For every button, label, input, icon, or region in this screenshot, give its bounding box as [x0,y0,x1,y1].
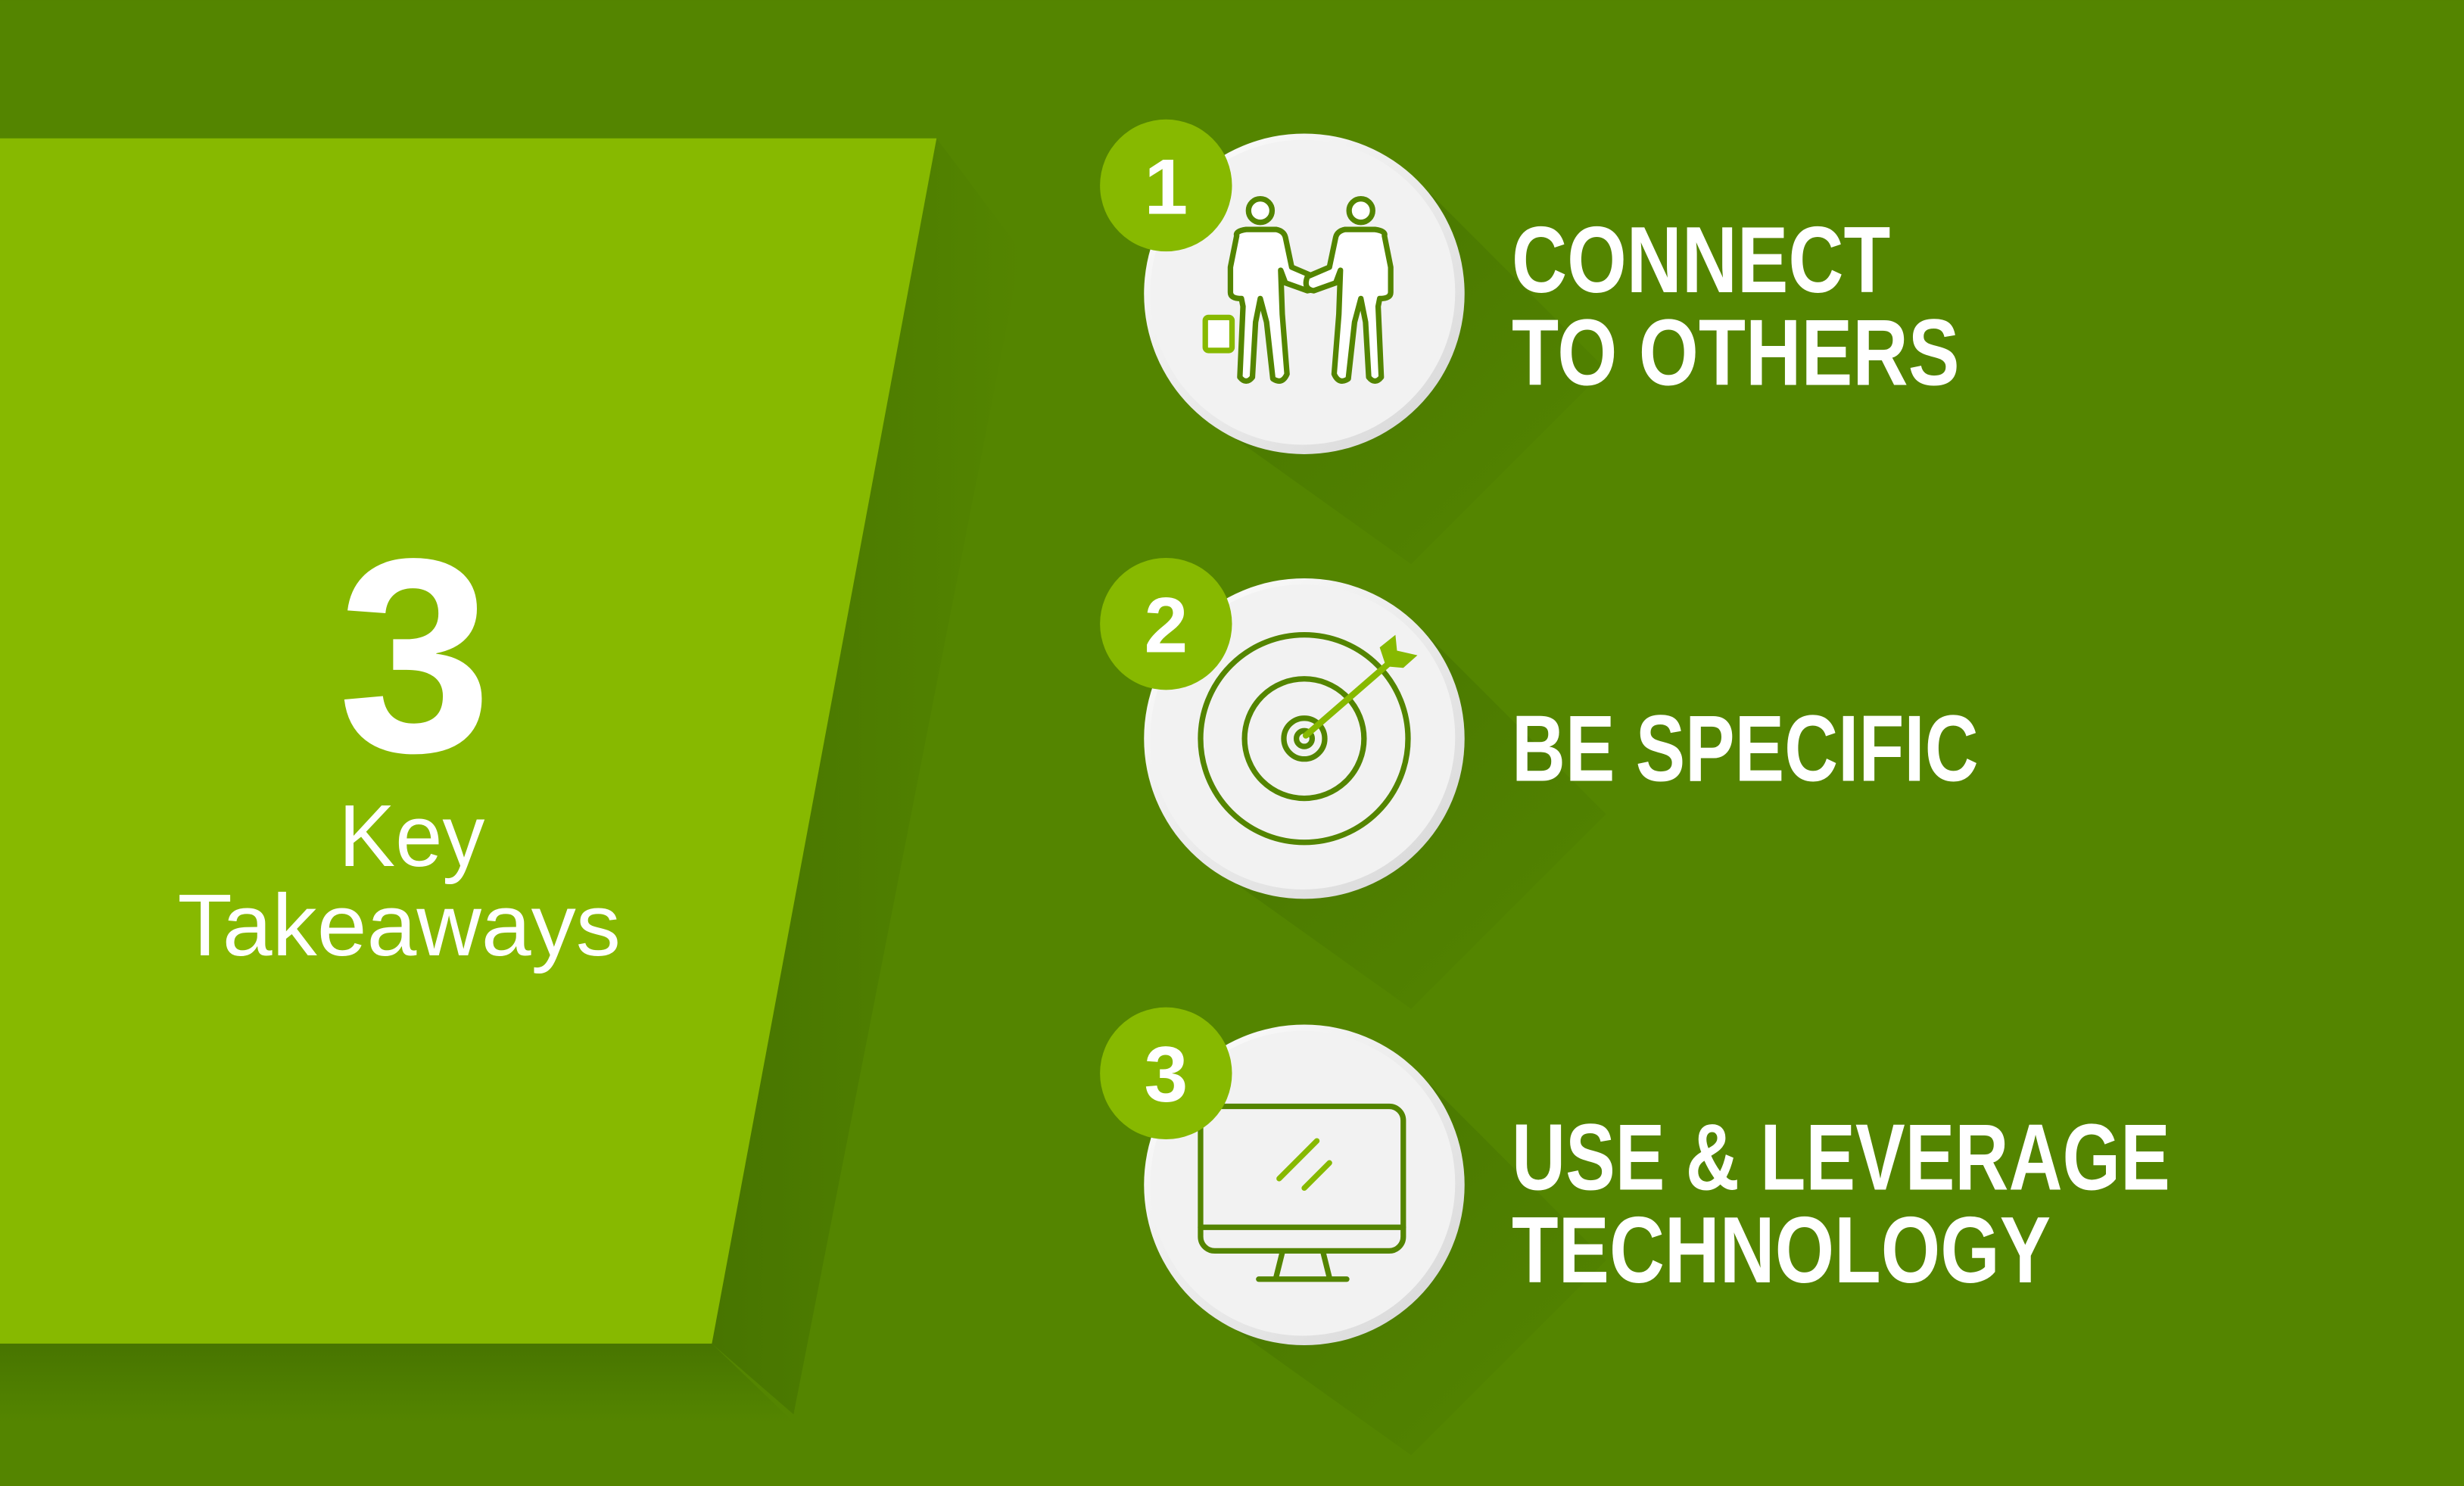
item 3: use & leverage technology: 3 [1144,1030,1188,1118]
item 2: be specific [1100,558,1979,1009]
label 2: BE SPECIFIC [1512,696,1979,802]
label 3: USE & LEVERAGE [1512,1104,2170,1210]
icon: briefcase [1205,317,1232,350]
badge 2 [1100,558,1232,690]
item 3: use & leverage technology [1100,1008,2170,1455]
item 3: use & leverage technology: TECHNOLOGY [1512,1198,2051,1303]
heading text: Key [338,787,484,885]
badge 1 [1100,120,1232,251]
panel: key takeaways [0,139,936,1344]
item 1: connect to others: TO OTHERS [1512,301,1960,406]
icon: monitor [1201,1106,1403,1279]
item 2: be specific: 2 [1144,581,1188,669]
icon: target with arrow [1201,635,1408,843]
icon: handshake people [1230,199,1391,381]
heading number 3: 3 [338,501,492,810]
label 1: CONNECT [1512,207,1890,313]
item 1: connect to others [1100,120,1960,564]
panel: key takeaways: Takeaways [178,876,621,974]
badge 3 [1100,1008,1232,1139]
item 1: connect to others: 1 [1144,142,1188,230]
panel shadow [712,139,1021,1414]
